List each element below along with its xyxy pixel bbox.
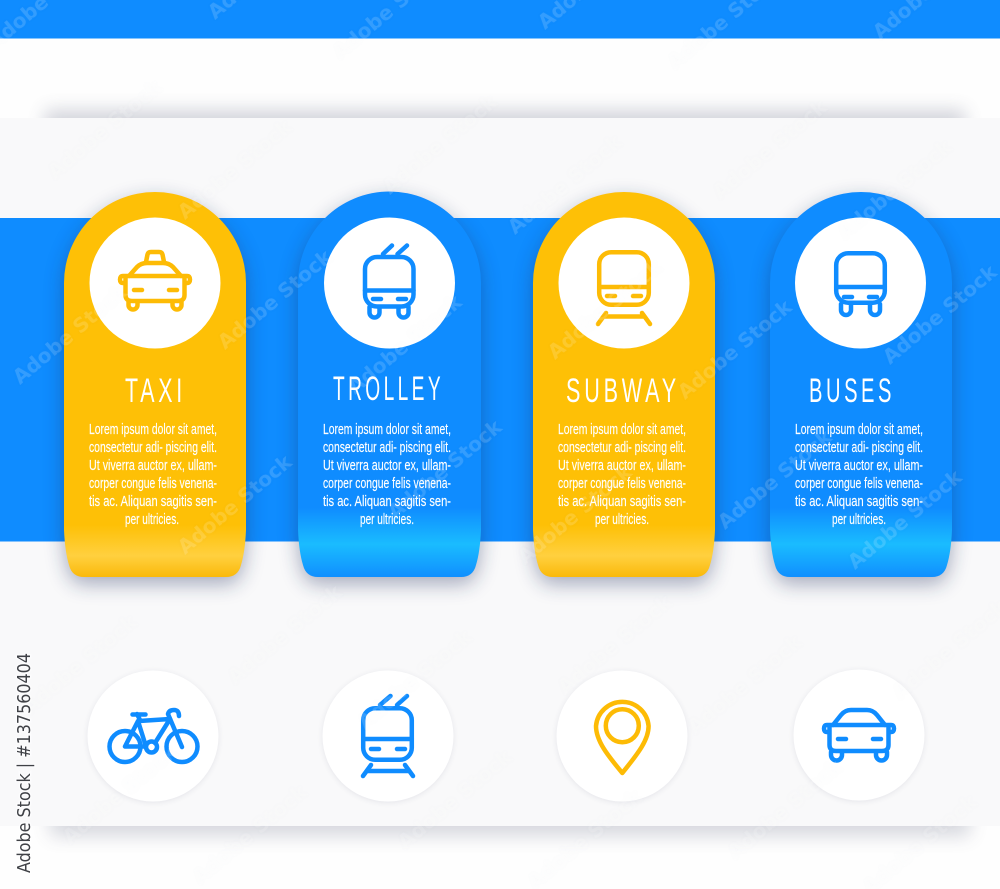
stock watermarks: Adobe Stock (8, 279, 132, 389)
text block: trolley: consectetur adi- piscing elit. (323, 439, 451, 456)
stock watermarks: Adobe Stock (513, 459, 637, 569)
text block: trolley: tis ac. Aliquan sagitis sen- (323, 493, 451, 510)
panel: trolley (298, 191, 481, 584)
icon: subway (598, 252, 650, 324)
text block: taxi: corper congue felis venena- (89, 475, 217, 492)
tab body (64, 192, 246, 577)
vertical stock credit: Adobe Stock | #137560404 (14, 653, 35, 873)
top blue bar (0, 0, 1000, 38)
text block: trolley: Ut viverra auctor ex, ullam- (323, 457, 451, 474)
icon circle (558, 218, 690, 348)
panel: buses (770, 192, 952, 584)
stock watermarks: Adobe Stock (393, 744, 517, 854)
circle shadow (556, 672, 688, 802)
icon circle (324, 218, 455, 348)
blue horizontal band (0, 218, 1000, 542)
stock watermarks: Adobe Stock (188, 779, 312, 889)
text block: subway: per ultricies. (595, 511, 649, 528)
text block: trolley: per ultricies. (360, 511, 414, 528)
tab shadow (64, 199, 246, 584)
stock watermarks: Adobe Stock (723, 754, 847, 864)
stock watermarks: Adobe Stock (708, 94, 832, 204)
stock watermarks: Adobe Stock (173, 449, 297, 559)
panel bottom shadow (50, 800, 970, 836)
text block: subway: consectetur adi- piscing elit. (558, 439, 686, 456)
icon circle (90, 218, 220, 348)
heading: subway: SUBWAY (566, 372, 680, 410)
tab body (298, 191, 481, 577)
text block: taxi: consectetur adi- piscing elit. (89, 439, 217, 456)
stock watermarks: Adobe Stock (378, 89, 502, 199)
text block: subway: Lorem ipsum dolor sit amet, (558, 421, 686, 438)
circle shadow (322, 672, 454, 802)
heading: taxi: TAXI (125, 372, 186, 410)
tab shadow (298, 198, 481, 584)
text block: trolley (323, 421, 451, 528)
text block: buses: tis ac. Aliquan sagitis sen- (795, 493, 923, 510)
badge: bicycle (88, 670, 218, 802)
panel top shadow (45, 110, 965, 140)
stock watermarks: Adobe Stock (833, 134, 957, 244)
text block: buses: per ultricies. (832, 511, 886, 528)
circle shadow (88, 672, 218, 802)
text block: taxi: Lorem ipsum dolor sit amet, (89, 421, 217, 438)
stock watermarks: Adobe Stock (223, 579, 347, 689)
circle (556, 670, 688, 802)
stock watermarks: Adobe Stock (553, 589, 677, 699)
stock watermarks: Adobe Stock (543, 254, 667, 364)
stock watermarks: Adobe Stock (503, 129, 627, 239)
tab body (770, 192, 952, 577)
circle shadow (794, 670, 924, 802)
panel: taxi (64, 192, 246, 584)
badge: trolley train (322, 670, 454, 802)
text block: taxi: tis ac. Aliquan sagitis sen- (89, 493, 217, 510)
tab body (533, 192, 715, 577)
icon: trolley (365, 246, 414, 318)
icon: bicycle (110, 710, 198, 762)
icon: car (824, 710, 894, 760)
stock watermarks: Adobe Stock (843, 464, 967, 574)
text block: taxi: Ut viverra auctor ex, ullam- (89, 457, 217, 474)
icon: trolley train (363, 696, 413, 776)
circle (322, 670, 454, 802)
text block: subway: Ut viverra auctor ex, ullam- (558, 457, 686, 474)
text block: buses (795, 421, 923, 528)
tab shadow (770, 199, 952, 584)
text block: buses: consectetur adi- piscing elit. (795, 439, 923, 456)
stock watermarks: Adobe Stock (343, 289, 467, 399)
stock watermarks: Adobe Stock (58, 739, 182, 849)
text block: trolley: Lorem ipsum dolor sit amet, (323, 421, 451, 438)
text block: trolley: corper congue felis venena- (323, 475, 451, 492)
badge: location pin (556, 670, 688, 802)
stock watermarks: Adobe Stock (353, 624, 477, 734)
text block: subway: tis ac. Aliquan sagitis sen- (558, 493, 686, 510)
icon circle (795, 218, 926, 348)
heading: buses: BUSES (809, 372, 895, 410)
text block: buses: Ut viverra auctor ex, ullam- (795, 457, 923, 474)
icon: location pin (596, 702, 649, 773)
heading: trolley: TROLLEY (333, 370, 444, 408)
main grey panel (0, 118, 1000, 826)
icon: taxi (120, 252, 190, 310)
tab shadow (533, 199, 715, 584)
circle (88, 670, 218, 802)
stock watermarks: Adobe Stock (43, 74, 167, 184)
text block: buses: corper congue felis venena- (795, 475, 923, 492)
text block: subway (558, 421, 686, 528)
stock watermarks: Adobe Stock (683, 629, 807, 739)
text block: taxi: per ultricies. (125, 511, 179, 528)
icon: bus (836, 253, 885, 315)
stock watermarks: Adobe Stock (878, 259, 1000, 369)
badge: car (794, 670, 924, 802)
stock watermarks: Adobe Stock (18, 609, 142, 719)
stock watermarks: Adobe Stock (173, 114, 297, 224)
stock watermarks: Adobe Stock (673, 294, 797, 404)
circle (794, 670, 924, 800)
text block: subway: corper congue felis venena- (558, 475, 686, 492)
stock watermarks: Adobe Stock (713, 424, 837, 534)
text block: taxi (89, 421, 217, 528)
stock watermarks: Adobe Stock (213, 244, 337, 354)
text block: buses: Lorem ipsum dolor sit amet, (795, 421, 923, 438)
panel: subway (533, 192, 715, 584)
stock watermarks: Adobe Stock (383, 414, 507, 524)
